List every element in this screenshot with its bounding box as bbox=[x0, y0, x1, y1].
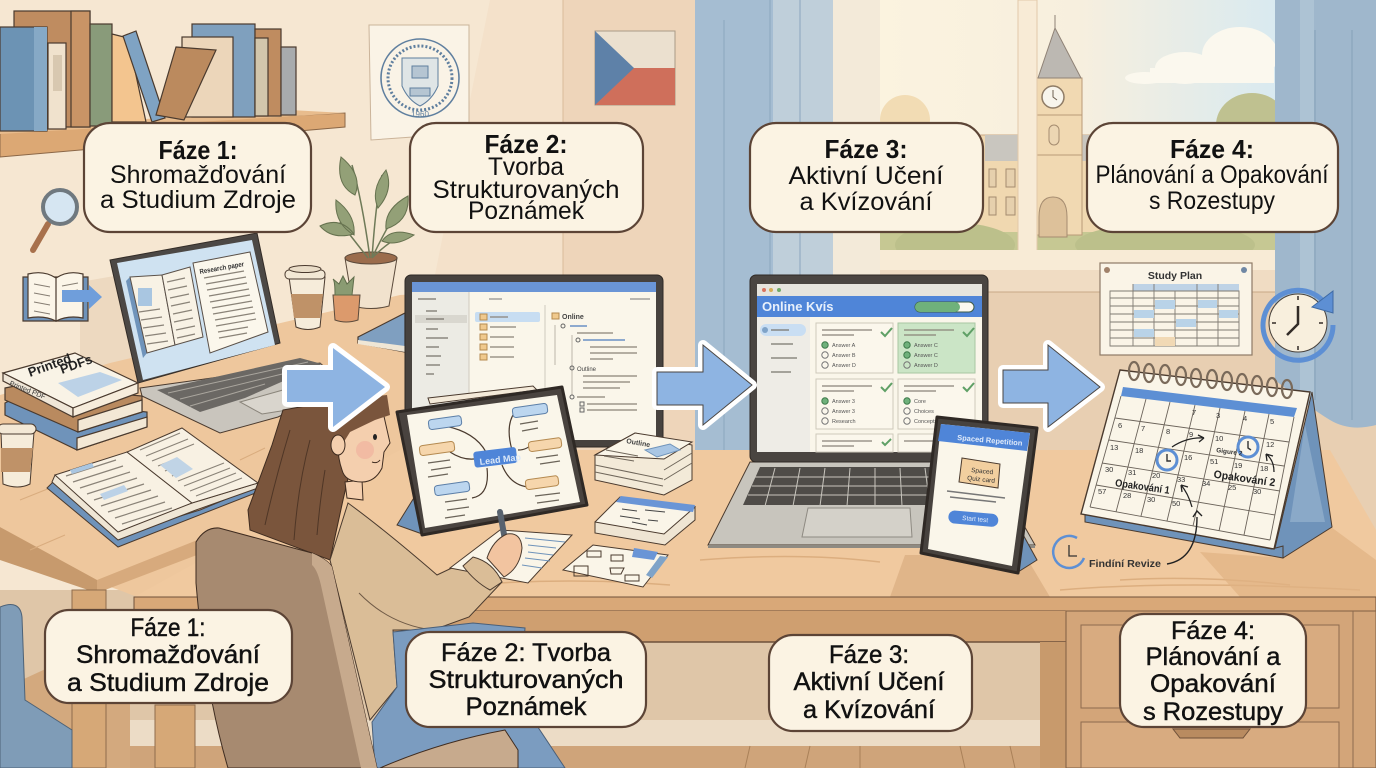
desk calendar bbox=[1081, 362, 1332, 558]
laptop with online quiz: Concepts bbox=[914, 419, 937, 425]
callout: bottom phase 4 bbox=[1120, 614, 1306, 727]
girl: sweater bbox=[330, 503, 502, 720]
left curtain bbox=[695, 0, 880, 460]
desk calendar: 6 bbox=[1118, 421, 1122, 430]
phone tablet with flashcard: Spaced bbox=[971, 467, 994, 476]
callout: bottom phase 3: Aktivní Učení bbox=[794, 668, 945, 696]
desk calendar: 31 bbox=[1128, 468, 1136, 477]
desk calendar: Gigure 2 bbox=[1216, 447, 1243, 458]
desk drawers bbox=[1040, 611, 1376, 768]
arrow: phase 3 to phase 4 bbox=[1003, 345, 1100, 427]
final review label with arrow: Findíní Revize bbox=[1089, 559, 1161, 570]
callout: top phase 4: Fáze 4: bbox=[1170, 134, 1254, 164]
laptop with online quiz: Answer 3 bbox=[832, 409, 855, 415]
callout: top phase 3: a Kvízování bbox=[800, 188, 933, 216]
laptop with online quiz: Answer B bbox=[832, 353, 856, 359]
note card stack bbox=[595, 433, 692, 495]
flashcards stack bbox=[595, 496, 695, 545]
phone tablet with flashcard: Quiz card bbox=[967, 475, 996, 485]
window with campus view bbox=[880, 0, 1288, 292]
note card stack: Outline bbox=[626, 438, 651, 449]
girl: face bbox=[331, 395, 390, 500]
desk calendar: 13 bbox=[1110, 443, 1118, 452]
desk calendar: 18 bbox=[1260, 464, 1268, 473]
Czech flag bbox=[595, 31, 675, 105]
desk calendar: 33 bbox=[1177, 475, 1185, 484]
callout: top phase 1: Fáze 1: bbox=[158, 135, 238, 165]
desk calendar: 34 bbox=[1202, 479, 1210, 488]
laptop with online quiz: Answer C bbox=[914, 353, 938, 359]
callout: top phase 4: s Rozestupy bbox=[1149, 187, 1275, 215]
callout: bottom phase 1: a Studium Zdroje bbox=[67, 669, 269, 697]
desk calendar: Opakování 2 bbox=[1213, 469, 1276, 489]
arrow: phase 2 to phase 3 bbox=[657, 345, 752, 425]
callout: top phase 2: Tvorba bbox=[488, 153, 564, 181]
laptop with research paper bbox=[110, 233, 345, 433]
callout: top phase 2: Fáze 2: bbox=[484, 129, 568, 159]
desk calendar: 50 bbox=[1172, 499, 1180, 508]
callout: bottom phase 1 bbox=[45, 610, 292, 703]
laptop with online quiz: Answer 3 bbox=[832, 399, 855, 405]
callout: top phase 1: Shromažďování bbox=[110, 161, 286, 189]
desk calendar: 30 bbox=[1253, 487, 1261, 496]
callout: top phase 3: Fáze 3: bbox=[824, 134, 908, 164]
laptop with online quiz bbox=[708, 275, 1035, 548]
callout: top phase 4: Plánování a Opakování bbox=[1096, 161, 1329, 189]
stack of printed PDFs: Printed PDF bbox=[8, 380, 46, 401]
girl: hair bbox=[248, 400, 350, 560]
desk calendar: 16 bbox=[1184, 453, 1192, 462]
bookshelf with books bbox=[0, 11, 345, 157]
callout: bottom phase 4: Opakování bbox=[1150, 670, 1276, 698]
phone tablet with flashcard bbox=[921, 417, 1037, 573]
desk calendar: 10 bbox=[1215, 434, 1223, 443]
under-desk area and floor bbox=[0, 590, 1376, 768]
laptop with online quiz: Online Kvís bbox=[762, 299, 834, 314]
laptop with online quiz: Answer A bbox=[832, 343, 856, 349]
callout: top phase 2: Strukturovaných bbox=[432, 176, 620, 204]
laptop with online quiz: Answer D bbox=[832, 363, 856, 369]
desk calendar: 9 bbox=[1189, 430, 1193, 439]
callout: bottom phase 4: Plánování a bbox=[1146, 643, 1281, 671]
callout: bottom phase 3: Fáze 3: bbox=[829, 641, 909, 669]
potted plant bbox=[320, 157, 414, 308]
blue cushion bbox=[0, 605, 72, 768]
laptop with online quiz: Answer C bbox=[914, 343, 938, 349]
desk calendar: 20 bbox=[1152, 471, 1160, 480]
study plan poster: Study Plan bbox=[1148, 270, 1202, 282]
diagram card bbox=[563, 545, 668, 587]
callout: bottom phase 2: Fáze 2: Tvorba bbox=[441, 639, 611, 667]
callout: bottom phase 2 bbox=[406, 632, 646, 727]
laptop with research paper: Research paper bbox=[199, 261, 245, 276]
desk left wing bbox=[0, 295, 440, 768]
laptop with online quiz: Answer D bbox=[914, 363, 938, 369]
university seal poster bbox=[369, 25, 469, 140]
desk calendar: 8 bbox=[1166, 427, 1170, 436]
callout: bottom phase 4: Fáze 4: bbox=[1171, 617, 1255, 645]
callout: top phase 4 bbox=[1087, 123, 1338, 232]
tablet with mind map bbox=[397, 386, 587, 535]
icon: open book with arrow bbox=[23, 273, 102, 321]
desk calendar: 25 bbox=[1228, 483, 1236, 492]
handwritten notes and hand bbox=[450, 512, 572, 590]
coffee cup left bbox=[0, 424, 36, 487]
desk calendar: 30 bbox=[1105, 465, 1113, 474]
callout: top phase 1: a Studium Zdroje bbox=[100, 186, 296, 214]
desk calendar: 18 bbox=[1135, 446, 1143, 455]
callout: top phase 3: Aktivní Učení bbox=[788, 162, 944, 190]
arrow: phase 1 to phase 2 bbox=[287, 348, 385, 427]
small cactus pot bbox=[333, 276, 360, 322]
callout: bottom phase 2: Poznámek bbox=[466, 693, 587, 721]
main desk bbox=[134, 290, 1376, 642]
callout: top phase 2: Poznámek bbox=[468, 197, 584, 225]
icon: clock with cycle arrow bbox=[1263, 290, 1333, 360]
callout: bottom phase 2: Strukturovaných bbox=[428, 666, 624, 694]
coffee cup on desk bbox=[285, 266, 325, 330]
callout: bottom phase 1: Fáze 1: bbox=[130, 614, 206, 642]
desk calendar: 3 bbox=[1216, 411, 1220, 420]
callout: bottom phase 3 bbox=[769, 635, 972, 731]
desk calendar: 7 bbox=[1192, 408, 1196, 417]
stack of printed PDFs: Printed bbox=[26, 350, 73, 380]
right curtain bbox=[1275, 0, 1376, 428]
desk calendar: 51 bbox=[1210, 457, 1218, 466]
desk calendar: 57 bbox=[1098, 487, 1106, 496]
phone tablet with flashcard: Start test bbox=[962, 515, 989, 524]
callout: top phase 1 bbox=[84, 123, 311, 232]
desk calendar: 28 bbox=[1123, 491, 1131, 500]
tablet with mind map: Lead Map bbox=[479, 452, 522, 467]
chair bbox=[196, 528, 518, 768]
monitor with notes app bbox=[405, 275, 663, 447]
callout: top phase 3 bbox=[750, 123, 983, 232]
desk calendar: 7 bbox=[1141, 424, 1145, 433]
callout: bottom phase 3: a Kvízování bbox=[803, 696, 935, 724]
university seal poster: 1960 bbox=[411, 110, 429, 119]
phone tablet with flashcard: Spaced Repetition bbox=[957, 433, 1023, 448]
laptop with online quiz: Core bbox=[914, 399, 926, 405]
callout: bottom phase 4: s Rozestupy bbox=[1143, 698, 1284, 726]
open book on desk bbox=[47, 428, 258, 547]
stack of printed PDFs bbox=[3, 350, 147, 450]
monitor with notes app: Outline bbox=[577, 367, 597, 373]
magnifying glass bbox=[33, 190, 77, 250]
callout: bottom phase 1: Shromažďování bbox=[76, 641, 260, 669]
desk calendar: 12 bbox=[1266, 440, 1274, 449]
callout: top phase 2 bbox=[410, 123, 643, 232]
desk calendar: Opakování 1 bbox=[1114, 477, 1171, 497]
desk calendar: 4 bbox=[1243, 414, 1247, 423]
desk calendar: 19 bbox=[1234, 461, 1242, 470]
laptop with online quiz: Choices bbox=[914, 409, 934, 415]
notebook on desk bbox=[358, 313, 405, 352]
final review label with arrow bbox=[1053, 511, 1202, 570]
desk calendar: 30 bbox=[1147, 495, 1155, 504]
study plan poster bbox=[1100, 263, 1252, 355]
desk calendar: 5 bbox=[1270, 417, 1274, 426]
laptop with online quiz: Research bbox=[832, 419, 856, 425]
girl: jeans bbox=[372, 623, 565, 768]
monitor with notes app: Online bbox=[562, 314, 584, 321]
stack of printed PDFs: PDFs bbox=[58, 351, 94, 377]
